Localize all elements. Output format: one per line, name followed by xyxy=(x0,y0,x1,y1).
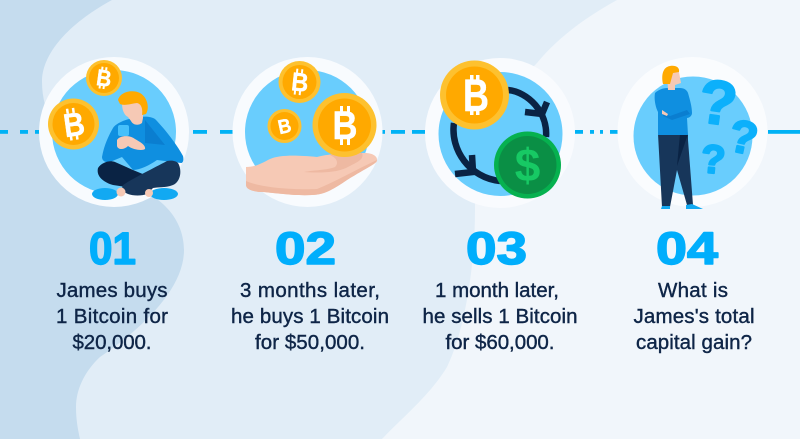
icon: dollar coin: $ xyxy=(515,139,540,191)
figure: standing man xyxy=(655,66,703,209)
icon: bitcoin to dollar exchange xyxy=(425,58,575,208)
number 04: 04 xyxy=(656,223,718,274)
text: step 4 description xyxy=(634,279,754,354)
text: step 1 description xyxy=(56,279,168,354)
panel: step 3 xyxy=(422,58,578,354)
icon: open hand xyxy=(246,153,377,195)
number 01: 01 xyxy=(89,223,136,274)
icon: large bitcoin coin: B xyxy=(61,105,87,144)
icon: bitcoin coin xyxy=(440,60,509,130)
text: step 2 description: he buys 1 Bitcoin xyxy=(231,305,389,328)
text: step 3 description xyxy=(422,279,578,354)
number 03: 03 xyxy=(466,223,527,274)
text: step 2 description: 3 months later, xyxy=(240,279,380,302)
text: step 3 description: for $60,000. xyxy=(446,331,554,354)
icon: small bitcoin coin: B xyxy=(276,115,293,139)
icon: cycle arrows xyxy=(453,90,547,181)
icon: large bitcoin coin xyxy=(312,93,376,157)
icon: dollar coin xyxy=(494,132,561,198)
text: step 4 description: What is xyxy=(658,279,728,302)
number 02: 02 xyxy=(275,223,336,274)
text: step 1 description: 1 Bitcoin for xyxy=(56,305,168,328)
text: step 1 description: James buys xyxy=(56,279,168,302)
text: step 3 description: 1 month later, xyxy=(435,279,559,302)
icon: small bitcoin coin: B xyxy=(95,64,113,92)
text: step 3 description: he sells 1 Bitcoin xyxy=(422,305,578,328)
icon: large bitcoin coin: B xyxy=(332,104,358,148)
icon: top bitcoin coin xyxy=(278,61,320,103)
icon: large bitcoin coin xyxy=(48,98,99,150)
icon: bitcoin coin: B xyxy=(463,70,489,121)
icon: small bitcoin coin xyxy=(86,60,122,96)
text: step 2 description: for $50,000. xyxy=(255,331,365,354)
icon: large question mark: ? xyxy=(694,67,741,140)
panel: step 2 xyxy=(231,57,389,354)
icon: hand holding bitcoins xyxy=(232,57,382,207)
icon: thinking man with question marks xyxy=(618,57,768,209)
text: step 4 description: capital gain? xyxy=(636,331,752,354)
icon: small bitcoin coin xyxy=(268,109,302,143)
figure: sitting man xyxy=(92,91,183,200)
panel: step 1 xyxy=(39,57,189,354)
text: step 4 description: James's total xyxy=(634,305,754,328)
icon: right question mark: ? xyxy=(724,109,763,165)
text: step 1 description: $20,000. xyxy=(72,331,152,354)
dashed connector line xyxy=(0,130,800,134)
icon: person with bitcoins xyxy=(39,57,189,207)
icon: lower question mark: ? xyxy=(699,137,727,183)
icon: top bitcoin coin: B xyxy=(290,66,310,98)
text: step 2 description xyxy=(231,279,389,354)
panel: step 4 xyxy=(618,57,768,354)
